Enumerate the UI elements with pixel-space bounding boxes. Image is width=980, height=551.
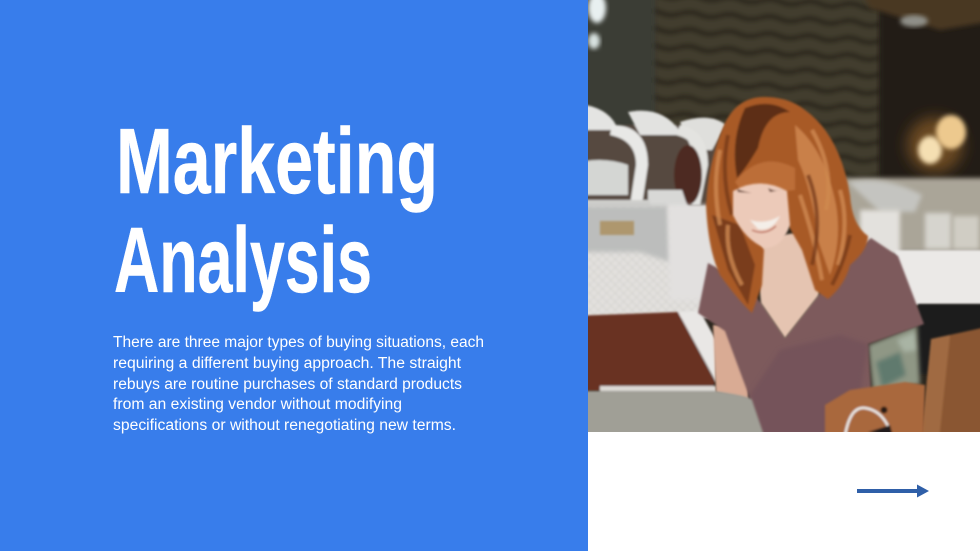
body text: requiring a different buying approach. The straight (113, 355, 462, 372)
body text: from an existing vendor without modifying (113, 396, 402, 413)
hair (706, 97, 868, 313)
smile (750, 216, 780, 229)
photo: woman (698, 97, 924, 450)
title: Analysis (114, 208, 372, 312)
photo: leather bag (824, 381, 926, 432)
face (733, 184, 790, 248)
body text: There are three major types of buying situations, each (113, 334, 484, 351)
chest skin (758, 232, 820, 339)
photo: wooden chair right (922, 327, 980, 432)
photo: wooden chair and cushion (588, 310, 717, 393)
tattooed arm (868, 325, 920, 392)
body text: rebuys are routine purchases of standard products (113, 376, 462, 393)
arrow (857, 484, 929, 498)
body text: specifications or without renegotiating new terms. (113, 417, 456, 434)
photo: laptop (588, 390, 764, 432)
shirt (698, 238, 924, 450)
photo: woman with laptop (570, 0, 980, 450)
body text (113, 334, 484, 434)
arm left (713, 325, 750, 400)
panel: blue background (0, 0, 588, 551)
title: Marketing (116, 109, 438, 213)
photo: white chairs (588, 104, 726, 207)
title (114, 109, 438, 312)
photo: sofa and wall (570, 178, 980, 374)
photo background: cafe interior (570, 0, 980, 450)
